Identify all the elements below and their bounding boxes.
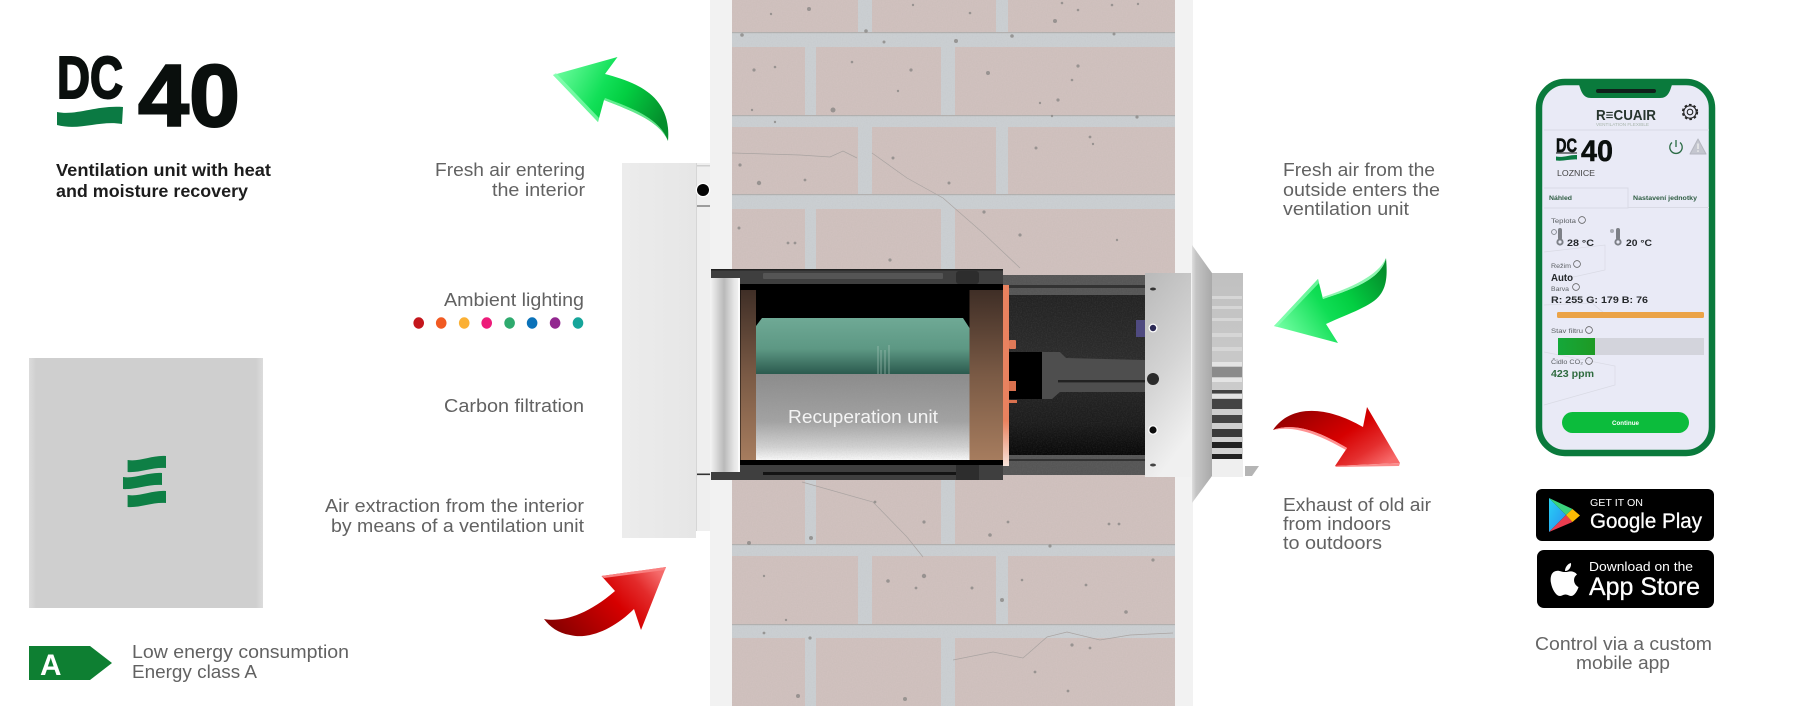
energy class text: Energy class A <box>132 662 257 682</box>
wall side bands <box>710 0 1193 706</box>
temperature readout: 20 °C <box>1626 238 1652 249</box>
label: exhaust of old air: from indoors <box>1283 514 1391 534</box>
CO2 sensor: 423 ppm <box>1551 369 1594 380</box>
side plate <box>1145 273 1191 477</box>
brick wall <box>732 0 1175 706</box>
temperature readout: Teplota <box>1551 218 1576 225</box>
subtitle <box>56 160 271 201</box>
filter status: Stav filtru <box>1551 328 1583 335</box>
CO2 sensor <box>1551 357 1594 380</box>
recuperation body <box>756 374 970 460</box>
phone body <box>1539 82 1712 453</box>
orange seal <box>1003 285 1009 466</box>
label: fresh air from the outside: ventilation unit <box>1283 199 1409 219</box>
label: exhaust of old air: Exhaust of old air <box>1283 495 1431 515</box>
right duct <box>1003 275 1145 475</box>
temperature readout: 28 °C <box>1567 238 1594 249</box>
energy class A badge <box>29 646 112 682</box>
logo: DC 40 <box>57 45 240 145</box>
exterior grille: side plate, flange and louvres <box>1145 245 1259 503</box>
phone notch <box>1578 81 1673 98</box>
ambient lighting colour dots <box>413 317 583 329</box>
app logo <box>1556 135 1613 168</box>
continue button: Continue <box>1612 420 1639 427</box>
colour readout: R: 255 G: 179 B: 76 <box>1551 295 1648 306</box>
white insert <box>711 278 740 472</box>
label: air extraction: by means of a ventilation unit <box>331 516 584 536</box>
wall speckles <box>738 2 1155 701</box>
flange <box>1192 245 1212 503</box>
label: carbon filtration: Carbon filtration <box>444 396 584 416</box>
continue button <box>1562 412 1689 433</box>
app tabs: Náhled <box>1549 195 1572 202</box>
faint app background lines <box>1544 245 1615 405</box>
energy class text: Low energy consumption <box>132 642 349 662</box>
mode readout: Auto <box>1551 273 1573 284</box>
app logo: 40 <box>1581 135 1613 168</box>
app tabs: Nastavení jednotky <box>1633 195 1698 202</box>
logo wave <box>57 107 123 127</box>
icon: play triangle <box>1549 498 1580 532</box>
label: fresh air entering the interior: the interior <box>492 180 585 200</box>
wall grain <box>732 0 1175 706</box>
outer dark frame <box>711 269 1003 480</box>
mode readout <box>1551 261 1580 284</box>
fan motor <box>1042 352 1145 399</box>
badge: App Store <box>1537 550 1714 608</box>
mortar joints <box>732 0 1175 706</box>
label: air extraction: Air extraction from the interior <box>325 496 584 516</box>
panel: gray front cover with logo mark <box>29 358 263 608</box>
room name: LOZNICE <box>1557 168 1595 178</box>
subtitle: and moisture recovery <box>56 181 248 201</box>
arrow: green, fresh air from outside <box>1274 258 1387 343</box>
app tabs <box>1544 188 1709 208</box>
label: fresh air entering the interior: Fresh air entering <box>435 160 585 180</box>
badge: Google Play: Google Play <box>1590 509 1702 533</box>
wall cracks <box>732 151 1173 660</box>
logo number 40: 40 <box>138 46 240 145</box>
label: control via custom mobile app: mobile app <box>1576 653 1670 673</box>
colour readout: Barva <box>1551 286 1569 293</box>
app brand: R≡CUAIR <box>1596 107 1656 124</box>
subtitle: Ventilation unit with heat <box>56 160 271 180</box>
badge: Google Play: GET IT ON <box>1590 497 1643 509</box>
brown recuperator flanks <box>740 290 756 460</box>
label: fresh air from the outside: outside enters the <box>1283 180 1440 200</box>
interior wall unit: white cover panel <box>622 163 710 538</box>
colour readout <box>1551 284 1704 318</box>
phone mockup <box>1539 81 1712 453</box>
icon: warning <box>1690 139 1706 154</box>
app brand: VENTILATION FLEXIBLE <box>1596 122 1649 127</box>
recuperation unit label: Recuperation unit <box>788 407 938 427</box>
app logo: DC <box>1556 136 1577 157</box>
CO2 sensor: Čidlo CO₂ <box>1551 357 1584 366</box>
arrow: red, air extraction <box>544 567 666 636</box>
temperature readout <box>1551 217 1652 249</box>
filter status <box>1551 327 1704 355</box>
cutaway: ventilation unit cross-section <box>711 269 1145 480</box>
label: fresh air from the outside <box>1283 160 1440 219</box>
badge: Google Play <box>1536 489 1714 541</box>
energy class text <box>132 642 349 682</box>
label: fresh air from the outside: Fresh air from the <box>1283 160 1435 180</box>
mode readout: Režim <box>1551 263 1571 270</box>
louvres <box>1212 273 1243 477</box>
arrow: red, exhaust to outdoors <box>1273 407 1400 467</box>
icon: apple <box>1551 563 1578 596</box>
icon: settings gear <box>1683 105 1697 119</box>
arrow: green, fresh air into the interior <box>553 57 668 141</box>
plate screws <box>1150 288 1156 290</box>
label: fresh air entering the interior <box>435 160 585 200</box>
teal heat exchanger <box>756 318 970 374</box>
label: air extraction <box>325 496 584 536</box>
badge: App Store: App Store <box>1589 573 1700 601</box>
bottom flap <box>1245 466 1259 476</box>
label: exhaust of old air: to outdoors <box>1283 533 1382 553</box>
label: control via custom mobile app: Control via a custom <box>1535 634 1712 654</box>
cover side strip <box>696 163 710 531</box>
energy class A badge: A <box>40 649 62 682</box>
outlet hole <box>696 183 710 197</box>
icon: power <box>1670 140 1682 153</box>
label: control via custom mobile app <box>1535 634 1712 673</box>
icon: three green waves <box>123 456 166 507</box>
badge: App Store: Download on the <box>1589 560 1693 574</box>
logo letters DC: DC <box>57 45 123 111</box>
label: exhaust of old air <box>1283 495 1431 553</box>
label: ambient lighting: Ambient lighting <box>444 290 584 310</box>
purple light <box>1136 320 1145 337</box>
